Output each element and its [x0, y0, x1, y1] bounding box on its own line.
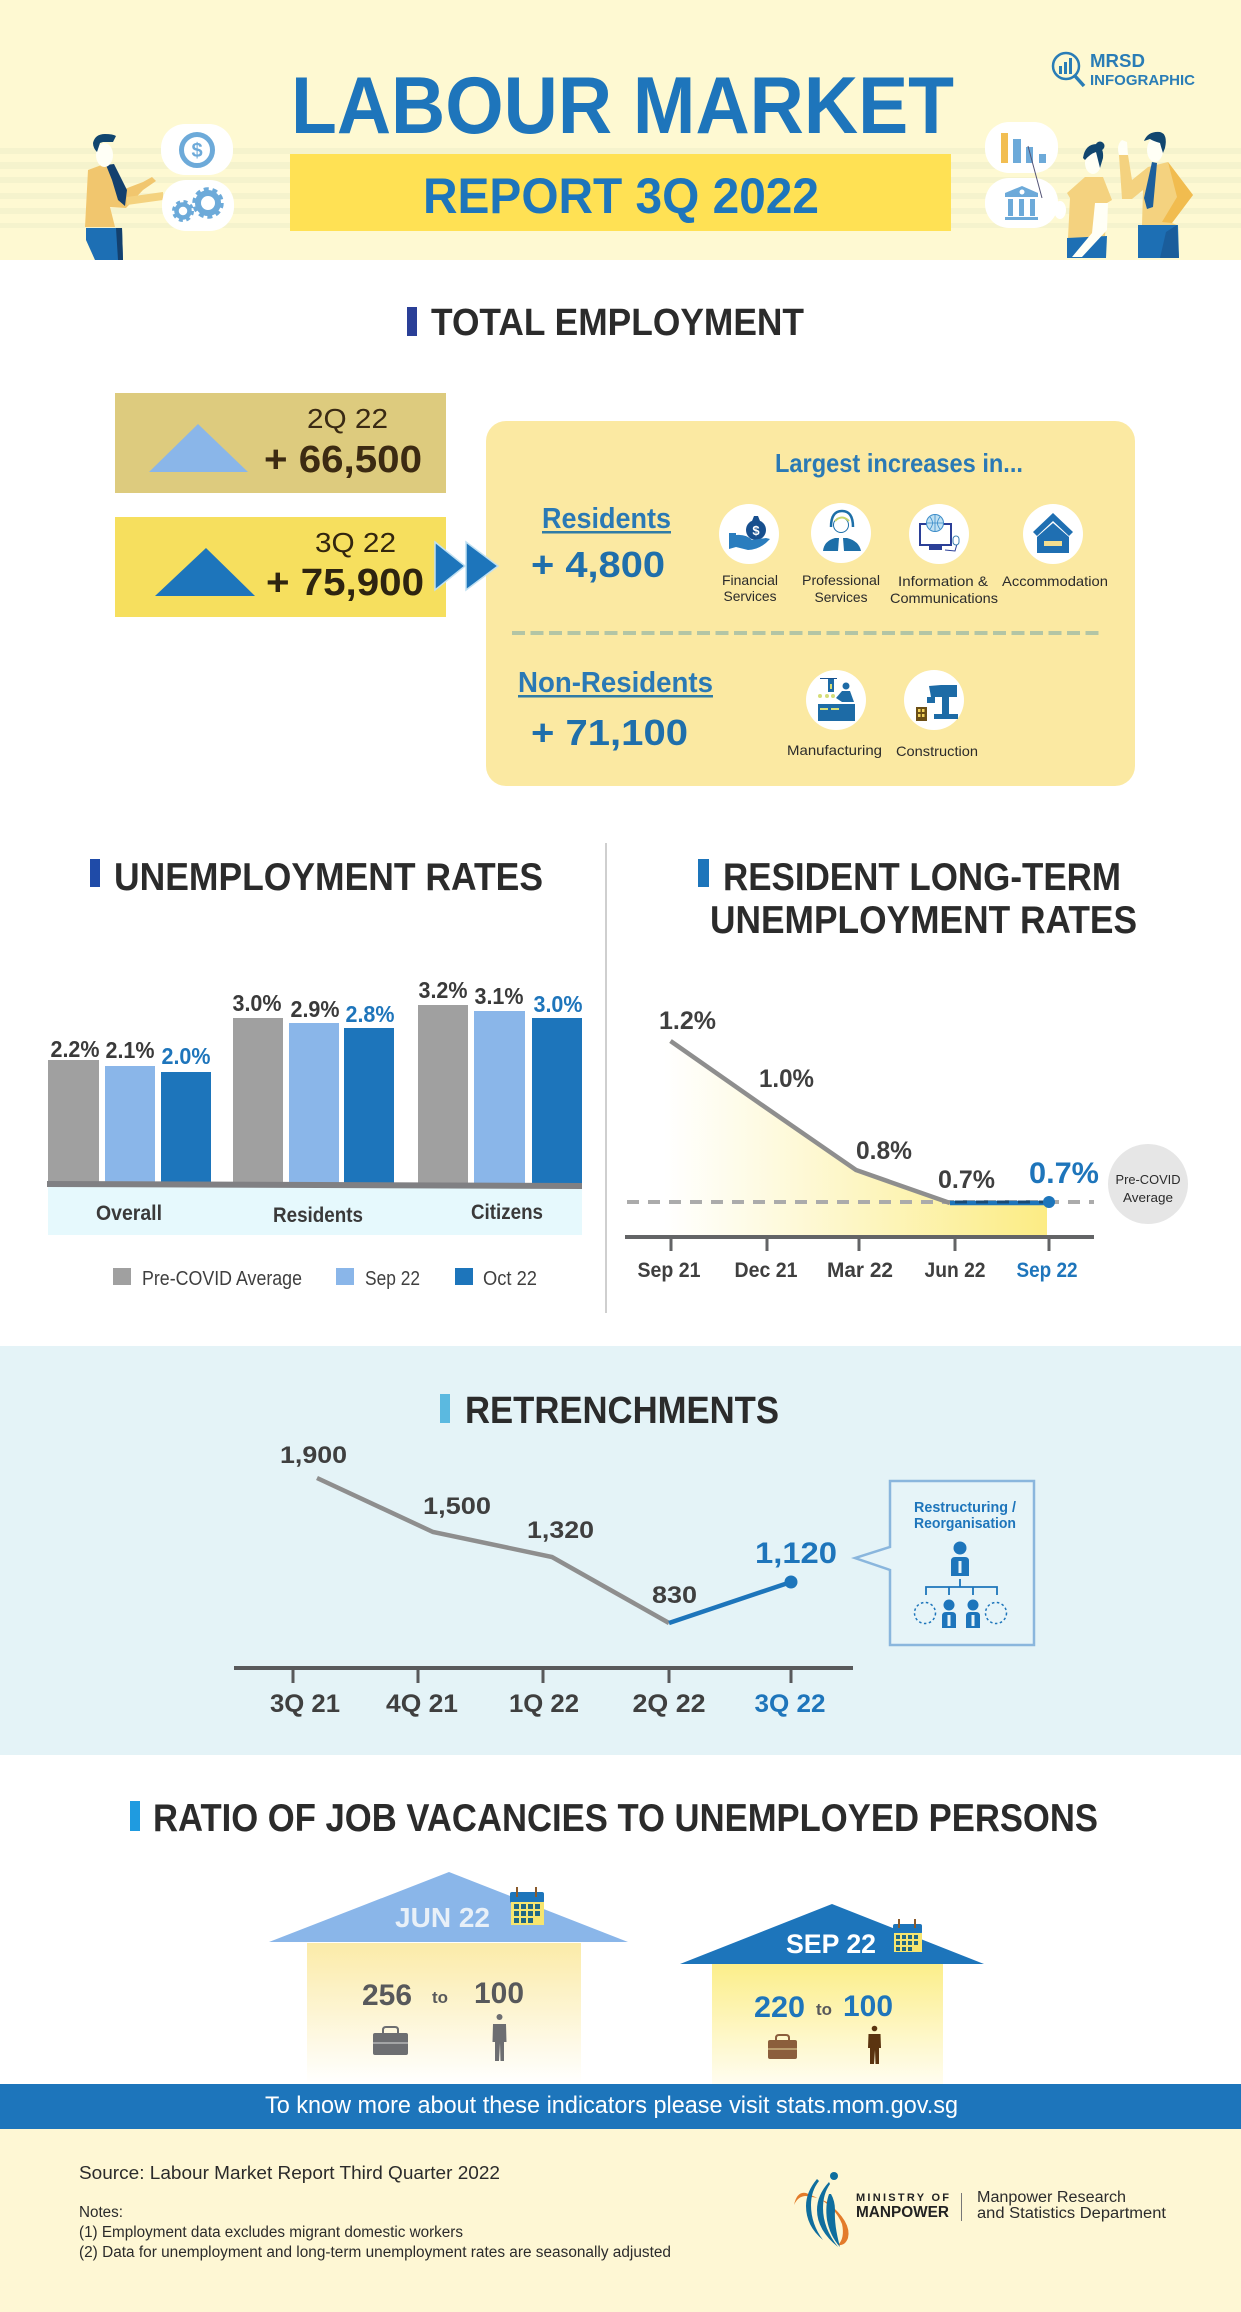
axis labels [270, 1690, 826, 1718]
category band [48, 1187, 582, 1235]
ratio figures: to [432, 1988, 448, 2007]
value labels: 2.2% [50, 1036, 100, 1062]
logo: ministry of manpower: Manpower Research [977, 2189, 1126, 2206]
ratio figures: 220 [754, 1991, 805, 2024]
heading: resident long-term unemployment rates: UNEMPLOYMENT RATES [710, 899, 1137, 942]
value labels: 3.0% [232, 990, 282, 1016]
panel: 3Q 22 employment change: + 75,900 [266, 562, 424, 604]
residents figure: + 4,800 [531, 544, 665, 585]
heading: ratio of job vacancies to unemployed persons: RATIO OF JOB VACANCIES TO UNEMPLOYED PERSONS [153, 1797, 1098, 1840]
label: financial services: Financial [722, 572, 778, 588]
icon: org chart [914, 1542, 1006, 1628]
legend: Pre-COVID Average [142, 1268, 302, 1290]
pre-covid dashed line [627, 1200, 1094, 1204]
logo: ministry of manpower [794, 2172, 1167, 2247]
value labels: 0.7% [1029, 1157, 1099, 1190]
category labels: Residents [273, 1204, 363, 1227]
residents figure [531, 503, 671, 585]
series line [670, 1041, 950, 1203]
residents figure: Residents [542, 503, 671, 535]
heading: largest increases in: Largest increases in... [775, 448, 1023, 478]
value labels: 1.2% [659, 1007, 716, 1035]
notes: Notes: [79, 2204, 123, 2221]
area fill [664, 1041, 1047, 1237]
value labels [50, 977, 582, 1069]
pre-covid badge: Pre-COVID [1116, 1172, 1180, 1187]
heading: resident long-term unemployment rates: RESIDENT LONG-TERM [723, 856, 1121, 899]
ratio figures: to [816, 2000, 832, 2019]
value labels: 1,320 [527, 1517, 594, 1544]
category labels: Overall [96, 1202, 162, 1225]
icon: man with raised hand [1118, 132, 1193, 258]
panel: 2Q 22 employment change [115, 393, 446, 493]
value labels: 2.1% [106, 1037, 154, 1063]
icon: calendar [510, 1887, 544, 1925]
value labels: 2.0% [162, 1043, 210, 1069]
callout: restructuring / reorganisation: Restructuring / [914, 1500, 1016, 1516]
label: communications: Communications [890, 590, 998, 606]
subtitle bar [290, 154, 951, 231]
axis labels: Jun 22 [924, 1259, 986, 1282]
label: manufacturing: Manufacturing [787, 742, 882, 758]
footer band: link [0, 2084, 1241, 2129]
category labels [96, 1201, 543, 1227]
icon: financial services: $ [752, 523, 760, 538]
value labels: 3.1% [474, 983, 524, 1009]
axis labels [638, 1259, 1078, 1282]
notes: (2) Data for unemployment and long-term unemployment rates are seasonally adjusted [79, 2244, 671, 2261]
heading: unemployment rates: UNEMPLOYMENT RATES [114, 856, 543, 899]
value labels: 0.7% [938, 1166, 995, 1194]
source: Source: Labour Market Report Third Quarter 2022 [79, 2162, 500, 2183]
value labels: 1,500 [423, 1493, 491, 1520]
arrow: double chevron [435, 542, 498, 590]
notes [79, 2204, 671, 2261]
value labels: 2.9% [290, 996, 340, 1022]
icon: dollar coin bubble: $ [191, 140, 203, 162]
line chart: retrenchments [234, 1442, 853, 1718]
axis labels: 2Q 22 [632, 1690, 706, 1718]
panel: 2Q 22 employment change: 2Q 22 [307, 403, 388, 434]
notes: (1) Employment data excludes migrant domestic workers [79, 2224, 463, 2241]
legend: Sep 22 [365, 1268, 420, 1290]
non-residents figure: + 71,100 [531, 712, 688, 753]
value labels: 1,900 [280, 1442, 347, 1469]
divider between charts [605, 843, 607, 1313]
axis labels: 3Q 22 [754, 1690, 826, 1718]
axis labels: Dec 21 [734, 1259, 798, 1282]
ratio figures: 100 [474, 1977, 524, 2010]
latest segment [950, 1196, 1055, 1208]
house: Sep 22 ratio [680, 1904, 984, 2084]
icon: manufacturing [806, 670, 866, 730]
header banner [0, 0, 1241, 260]
line chart: resident long-term unemployment [625, 1007, 1188, 1282]
icon: woman [1054, 142, 1112, 258]
label: information and: Information & [898, 573, 989, 589]
ratio figures [362, 1977, 524, 2012]
heading: retrenchments: RETRENCHMENTS [465, 1390, 779, 1432]
bars [48, 1005, 582, 1185]
icon: person [868, 2026, 881, 2064]
label: accommodation: Accommodation [1002, 573, 1108, 589]
value labels: 1.0% [759, 1065, 814, 1093]
panel: 3Q 22 employment change [115, 517, 446, 617]
icon: briefcase [373, 2027, 408, 2055]
logo: ministry of manpower: and Statistics Department [977, 2205, 1167, 2222]
pre-covid badge: Average [1123, 1190, 1173, 1205]
value labels: 3.2% [418, 977, 468, 1003]
icon: information and communications [909, 504, 969, 564]
panel: largest increases [486, 421, 1135, 786]
legend [113, 1268, 537, 1290]
footer band: link: To know more about these indicators please visit stats.mom.gov.sg [265, 2092, 958, 2119]
divider [512, 631, 1104, 635]
icon: professional services [811, 503, 871, 563]
label: professional: Professional [802, 572, 880, 588]
value labels [659, 1007, 1099, 1194]
axis labels: 1Q 22 [509, 1690, 579, 1718]
pre-covid badge [1108, 1144, 1188, 1224]
axis labels: 4Q 21 [386, 1690, 458, 1718]
label: services: Services [814, 589, 868, 605]
panel: 3Q 22 employment change: 3Q 22 [315, 527, 396, 558]
category labels: Citizens [471, 1201, 543, 1224]
subtitle bar: REPORT 3Q 2022 [423, 168, 819, 224]
heading: total employment: TOTAL EMPLOYMENT [431, 302, 804, 344]
callout: restructuring / reorganisation [855, 1481, 1034, 1645]
value labels: 3.0% [534, 991, 582, 1017]
legend: Oct 22 [483, 1268, 537, 1290]
icon: gears bubble [162, 180, 234, 231]
value labels [280, 1442, 837, 1609]
house: Sep 22 ratio: SEP 22 [786, 1929, 876, 1959]
label: construction: Construction [896, 743, 978, 759]
axis labels: Sep 22 [1016, 1259, 1078, 1282]
footer panel [0, 2129, 1241, 2312]
axis labels: Mar 22 [827, 1259, 893, 1282]
house: Jun 22 ratio [269, 1872, 628, 2084]
value labels: 1,120 [755, 1537, 837, 1570]
value labels: 2.8% [346, 1001, 394, 1027]
title: LABOUR MARKET [291, 61, 954, 151]
MRSD infographic logo: INFOGRAPHIC [1090, 72, 1195, 89]
non-residents figure: Non-Residents [518, 667, 713, 699]
axis labels: Sep 21 [638, 1259, 701, 1282]
MRSD infographic logo: MRSD [1090, 51, 1145, 71]
ratio figures [754, 1990, 893, 2024]
ratio figures: 256 [362, 1979, 412, 2012]
icon: briefcase [768, 2035, 797, 2059]
icon: calendar [893, 1919, 922, 1952]
logo: ministry of manpower: MINISTRY OF [856, 2192, 949, 2204]
value labels: 830 [652, 1582, 697, 1609]
axis [47, 1181, 582, 1189]
icon: man presenting [85, 134, 163, 260]
icon: financial services [719, 504, 779, 564]
panel: retrenchments [0, 1346, 1241, 1755]
bar chart: unemployment rates [47, 977, 582, 1290]
heading: resident long-term unemployment rates [698, 856, 1137, 942]
icon: construction [904, 670, 964, 730]
axis labels: 3Q 21 [270, 1690, 340, 1718]
icon: dollar coin bubble [161, 124, 233, 175]
value labels: 0.8% [856, 1137, 912, 1165]
icon: person [492, 2014, 506, 2061]
panel: 2Q 22 employment change: + 66,500 [264, 439, 422, 481]
house: Jun 22 ratio: JUN 22 [395, 1902, 490, 1933]
callout: restructuring / reorganisation: Reorganisation [914, 1516, 1016, 1532]
logo: ministry of manpower: MANPOWER [856, 2204, 949, 2221]
label: services: Services [724, 588, 776, 604]
MRSD infographic logo [1053, 51, 1195, 89]
axis [625, 1237, 1094, 1251]
ratio figures: 100 [843, 1990, 893, 2023]
non-residents figure [518, 667, 713, 753]
icon: bar chart bubble [985, 122, 1058, 173]
icon: bank bubble [985, 146, 1058, 228]
icon: accommodation [1023, 504, 1083, 564]
